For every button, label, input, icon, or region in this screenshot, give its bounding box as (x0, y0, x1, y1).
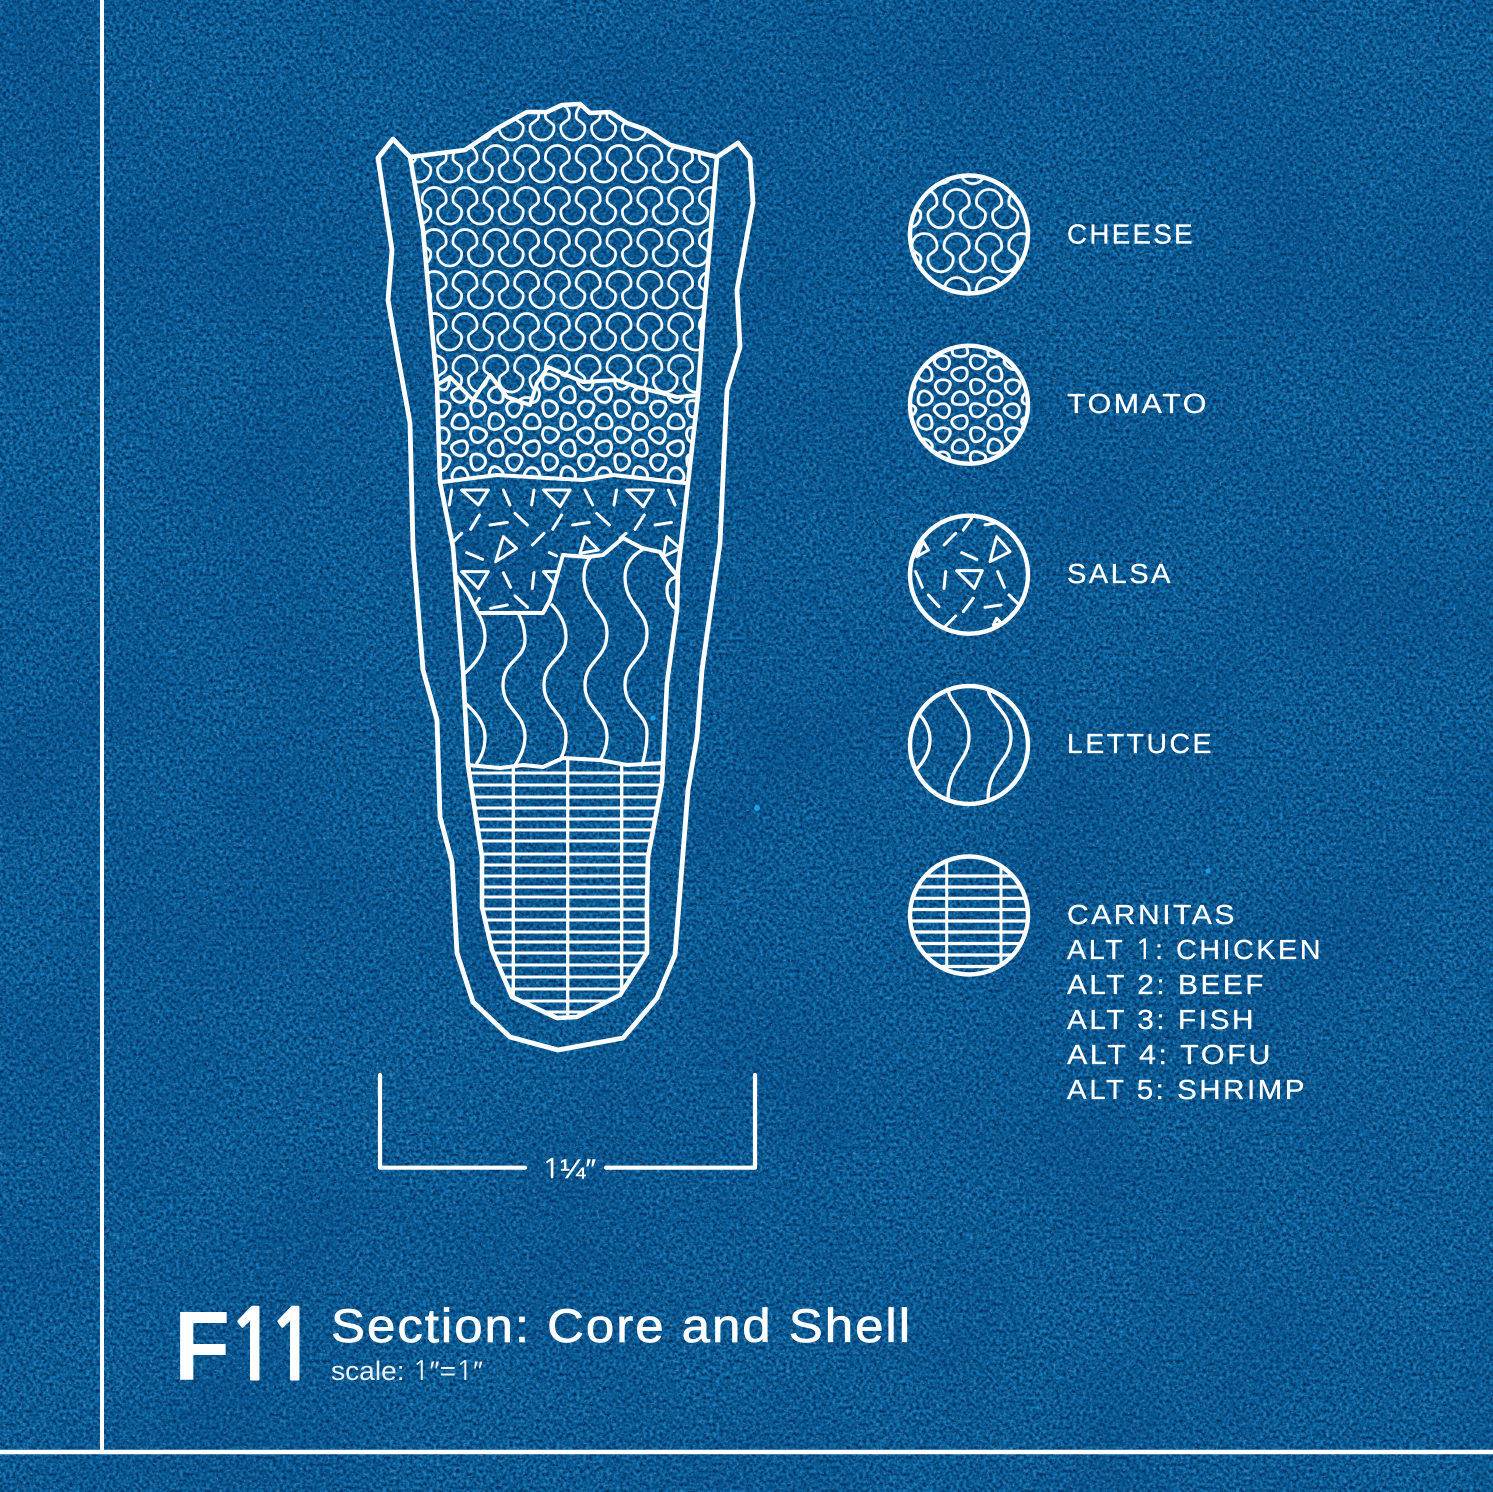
label: cheese: CHEESE (1067, 218, 1195, 250)
label: tomato: TOMATO (1067, 388, 1209, 419)
legend text: carnitas and alternates: CARNITAS (1067, 899, 1237, 930)
tortilla shell outline (378, 139, 753, 1050)
legend: tomato icon (910, 346, 1028, 464)
figure number (174, 1291, 319, 1401)
legend text: carnitas and alternates (1067, 899, 1323, 1105)
legend text: carnitas and alternates: ALT 4: TOFU (1067, 1039, 1273, 1070)
layer: carnitas grid (471, 760, 660, 1016)
diagram: burrito section core and shell (378, 100, 753, 1050)
legend: carnitas icon (905, 855, 1035, 975)
legend text: carnitas and alternates: ALT 5: SHRIMP (1067, 1074, 1307, 1105)
layer: lettuce waves (465, 550, 678, 765)
scale note: scale: 1″=1″ (331, 1356, 483, 1386)
layer: cheese pattern (405, 100, 721, 410)
legend: lettuce icon (910, 686, 1028, 804)
dimension bracket (380, 1075, 755, 1184)
legend text: carnitas and alternates: ALT 1: CHICKEN (1067, 934, 1323, 965)
layer boundaries (437, 367, 698, 768)
layer: salsa triangles and dashes (449, 490, 680, 608)
legend: cheese icon (910, 176, 1028, 294)
layer: tomato pattern (437, 367, 698, 483)
filling outline with cheese top (410, 104, 717, 1018)
legend text: carnitas and alternates: ALT 3: FISH (1067, 1004, 1256, 1035)
figure number: 1 (266, 1298, 319, 1395)
legend text: carnitas and alternates: ALT 2: BEEF (1067, 969, 1266, 1000)
figure number: F (174, 1291, 230, 1401)
label: lettuce: LETTUCE (1067, 728, 1214, 759)
legend: salsa icon (910, 516, 1028, 634)
label: salsa: SALSA (1067, 558, 1173, 589)
title: Section: Core and Shell (331, 1299, 912, 1352)
dimension bracket: 1¼″ (542, 1154, 596, 1184)
figure number: 1 (226, 1298, 279, 1395)
